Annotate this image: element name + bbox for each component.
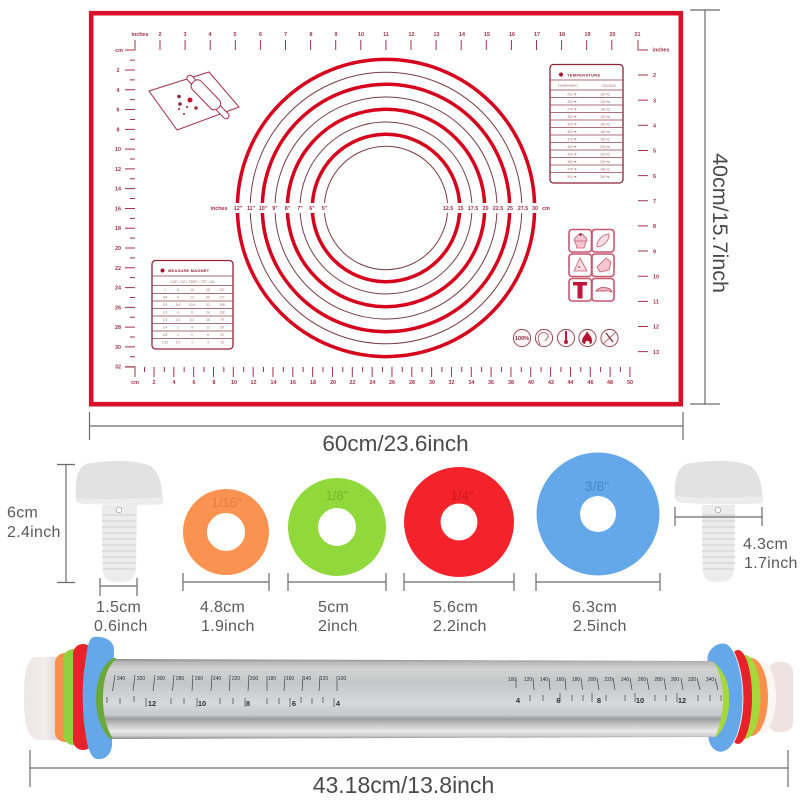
left etched ruler	[107, 675, 346, 708]
circle size labels: inches: 10"	[259, 206, 268, 212]
panel: measure magnet table: 4	[177, 311, 179, 315]
left etched ruler: 320	[137, 676, 145, 682]
panel: measure magnet table: 8	[191, 311, 193, 315]
panel: temperature table: 275 ℉	[567, 108, 577, 112]
top inch ruler	[125, 32, 640, 50]
panel: measure magnet table: 2	[177, 326, 179, 330]
circle size labels: cm: 27.5	[518, 206, 528, 212]
circle size labels: cm: 17.5	[468, 206, 478, 212]
left etched ruler: 4	[336, 699, 341, 708]
circle size labels: inches: inches	[210, 206, 228, 212]
bottom cm ruler: 40	[528, 380, 534, 386]
right etched ruler: 300	[671, 677, 679, 683]
right etched ruler: 200	[588, 677, 596, 683]
left cm ruler: 4	[116, 88, 120, 94]
right etched ruler: 260	[638, 677, 646, 683]
top inch ruler: 9	[334, 32, 338, 38]
right etched ruler: 280	[654, 677, 663, 683]
right etched ruler: 220	[604, 677, 613, 683]
right etched ruler: 180	[572, 677, 580, 683]
right etched ruler	[508, 677, 721, 705]
left etched ruler: 160	[286, 676, 294, 682]
right inch ruler	[638, 40, 670, 356]
panel: measure magnet table: 2	[191, 333, 193, 337]
left cm ruler: 18	[115, 226, 121, 232]
panel: measure magnet table: 1	[164, 288, 166, 292]
panel: temperature table: 100 ℃	[600, 92, 610, 96]
left cm ruler: 8	[116, 127, 120, 133]
left end cap	[24, 657, 60, 740]
panel: temperature table: 250 ℉	[567, 100, 577, 104]
left cm ruler: 12	[115, 167, 121, 173]
left cm ruler: 10	[115, 147, 121, 153]
left etched ruler: 6	[292, 699, 296, 708]
bottom cm ruler: 12	[250, 380, 256, 386]
left cm ruler: 6	[116, 108, 120, 114]
panel: temperature table: TEMPERATURE	[567, 72, 600, 78]
panel: temperature table: 190 ℃	[600, 138, 610, 142]
bottom cm ruler	[125, 367, 633, 386]
panel: temperature table: 500 ℉	[567, 175, 577, 179]
panel: measure magnet table: 24	[206, 311, 210, 315]
circle size labels: inches: 9"	[272, 206, 278, 212]
left etched ruler: 120	[320, 676, 328, 682]
panel: temperature table: 450 ℉	[567, 160, 577, 164]
circle size labels: inches: 5"	[322, 206, 328, 212]
top inch ruler: 12	[408, 32, 414, 38]
right end cap	[768, 662, 793, 732]
bottom cm ruler: 20	[330, 380, 336, 386]
bottom cm ruler: 44	[568, 380, 574, 386]
panel: measure magnet table: 1/2	[176, 341, 180, 345]
circle size labels: cm: 25	[507, 206, 513, 212]
disc: red 1/4: 5.6cm	[433, 599, 478, 616]
right inch ruler: 13	[653, 350, 659, 356]
bottom cm ruler: 18	[310, 380, 316, 386]
left tall knob with dimensions	[7, 461, 163, 635]
panel: temperature table: 140 ℃	[600, 108, 610, 112]
circle size labels: inches: 8"	[285, 206, 291, 212]
bottom cm ruler: 6	[192, 380, 196, 386]
dimension: mat width	[90, 412, 683, 456]
left cm ruler: 28	[115, 325, 121, 331]
disc: orange 1/16: 4.8cm	[200, 599, 245, 616]
panel: measure magnet table: 79	[220, 318, 224, 322]
bottom cm ruler: 48	[607, 380, 613, 386]
right inch ruler: 11	[653, 300, 659, 306]
left cm ruler: 30	[115, 345, 121, 351]
panel: measure magnet table: 6	[177, 296, 179, 300]
circle size labels: inches	[210, 206, 328, 212]
panel: temperature table: 475 ℉	[567, 168, 577, 172]
panel: temperature table: 425 ℉	[567, 152, 577, 156]
bottom cm ruler: 4	[172, 380, 176, 386]
disc: blue 3/8: 2.5inch	[573, 618, 627, 635]
panel: measure magnet table: 177	[219, 296, 225, 300]
dimension: rolling pin length: 43.18cm/13.8inch	[313, 772, 494, 798]
panel: measure magnet table: 2/3	[163, 303, 167, 307]
panel: temperature table: 160 ℃	[600, 122, 610, 126]
bottom cm ruler: 24	[370, 380, 376, 386]
panel: measure magnet table: 118	[219, 311, 225, 315]
icon: knob	[76, 461, 163, 582]
top inch ruler: 3	[184, 32, 186, 38]
disc: blue 3/8	[536, 474, 660, 635]
panel: temperature table: 260 ℃	[600, 175, 610, 179]
circle size labels: cm: 22.5	[493, 206, 503, 212]
panel: measure magnet table: 15	[220, 341, 224, 345]
circle size labels: cm	[443, 206, 550, 212]
circle size labels: cm: 20	[482, 206, 488, 212]
right etched ruler: 100	[508, 677, 516, 683]
bottom cm ruler: 46	[588, 380, 594, 386]
right spacer rings	[707, 643, 776, 752]
right inch ruler: 8	[653, 224, 656, 230]
top inch ruler: 16	[509, 32, 515, 38]
bottom cm ruler: 26	[389, 380, 395, 386]
left cm ruler: 2	[116, 68, 120, 74]
panel: measure magnet table: 1/3	[163, 318, 167, 322]
left cm ruler: 20	[115, 246, 121, 252]
dimension: mat height	[690, 10, 732, 404]
disc: orange 1/16	[183, 495, 269, 635]
right inch ruler: 5	[653, 148, 656, 154]
right etched ruler: 4	[516, 696, 521, 705]
left tall knob with dimensions: 2.4inch	[7, 524, 61, 541]
disc: red 1/4: 2.2inch	[433, 618, 487, 635]
panel: temperature table: 400 ℉	[567, 145, 577, 149]
panel: measure magnet table: 1	[191, 341, 193, 345]
top inch ruler: inches	[131, 32, 149, 38]
circle size labels: inches: 7"	[297, 206, 303, 212]
panel: measure magnet table: 12	[206, 326, 210, 330]
left etched ruler: 300	[157, 676, 165, 682]
top inch ruler: 20	[610, 32, 616, 38]
panel: temperature table: 120 ℃	[600, 100, 610, 104]
bottom cm ruler: 14	[270, 380, 276, 386]
panel: temperature table	[550, 64, 623, 183]
bottom cm ruler: 36	[488, 380, 494, 386]
panel: temperature table: 240 ℃	[600, 168, 610, 172]
panel: temperature table: 300 ℉	[567, 115, 577, 119]
left etched ruler: 240	[213, 676, 221, 682]
bottom cm ruler: cm	[131, 380, 139, 386]
panel: pastry mat	[91, 13, 681, 404]
bottom cm ruler: 28	[409, 380, 415, 386]
top inch ruler: 8	[310, 32, 312, 38]
dimension: mat width: 60cm/23.6inch	[322, 431, 469, 456]
panel: temperature table: 230 ℃	[600, 160, 610, 164]
panel: measure magnet table: 59	[220, 326, 224, 330]
panel: temperature table: 180 ℃	[600, 130, 610, 134]
top inch ruler: 5	[234, 32, 236, 38]
left etched ruler: 180	[268, 676, 276, 682]
panel: measure magnet table	[152, 260, 233, 349]
right etched ruler: 120	[524, 677, 532, 683]
rolling pin	[24, 637, 793, 759]
panel: temperature table: CELSIUS	[602, 84, 616, 88]
panel: measure magnet table: 4	[191, 326, 193, 330]
circle size labels: inches: 11"	[247, 206, 256, 212]
steel rod	[103, 659, 723, 739]
left spacer rings	[55, 637, 116, 759]
disc: green 1/8: 2inch	[318, 618, 358, 635]
disc: green 1/8: 1/8"	[326, 488, 349, 503]
panel: temperature table: 325 ℉	[567, 122, 577, 126]
bottom cm ruler: 2	[152, 380, 156, 386]
panel: measure magnet table: 1/16	[162, 341, 168, 345]
mat border	[91, 13, 681, 404]
bottom cm ruler: 8	[212, 380, 216, 386]
panel: measure magnet table: 16	[206, 318, 210, 322]
left cm ruler: 16	[115, 206, 121, 212]
top inch ruler: 6	[259, 32, 262, 38]
width label: 4.3cm	[743, 536, 788, 553]
left etched ruler: 10	[198, 699, 206, 708]
left etched ruler: 100	[338, 676, 346, 682]
top inch ruler: 7	[284, 32, 287, 38]
bottom cm ruler: 38	[508, 380, 514, 386]
left etched ruler: 340	[117, 676, 125, 682]
panel: measure magnet table: 1/4	[163, 326, 167, 330]
right short knob with dimensions: 1.7inch	[744, 555, 798, 572]
panel: measure magnet table: 8	[177, 288, 179, 292]
top inch ruler: 4	[208, 32, 212, 38]
circle size labels: cm: 30	[532, 206, 538, 212]
disc: red 1/4	[404, 485, 514, 635]
panel: measure magnet table: 6	[207, 333, 209, 337]
disc: orange 1/16: 1.9inch	[201, 618, 255, 635]
circle size labels: inches: 12"	[234, 206, 243, 212]
left etched ruler: 220	[232, 676, 240, 682]
panel: measure magnet table: 3	[207, 341, 209, 345]
disc: green 1/8: 5cm	[318, 599, 349, 616]
concentric measuring circles	[232, 59, 540, 357]
panel: temperature table: 200 ℃	[600, 145, 610, 149]
top inch ruler: 13	[434, 32, 440, 38]
disc: green 1/8	[288, 488, 386, 635]
disc: blue 3/8: 3/8"	[585, 478, 609, 494]
panel: measure magnet table: 48	[206, 288, 210, 292]
panel: measure magnet table: 5.4	[176, 303, 180, 307]
right etched ruler: 140	[540, 677, 548, 683]
bottom cm ruler: 34	[468, 380, 474, 386]
icon: knob	[675, 461, 763, 582]
right short knob with dimensions	[675, 461, 798, 582]
bottom cm ruler: 32	[448, 380, 454, 386]
right inch ruler: 12	[653, 324, 659, 330]
top inch ruler: 19	[584, 32, 590, 38]
circle size labels: cm: 15	[458, 206, 464, 212]
top inch ruler: 2	[158, 32, 162, 38]
right etched ruler: 12	[678, 696, 686, 705]
right etched ruler: 6	[556, 696, 561, 705]
right etched ruler: 320	[688, 677, 696, 683]
panel: measure magnet table: 2.6	[176, 318, 180, 322]
bottom cm ruler: 16	[290, 380, 296, 386]
icon grid: baking foods	[569, 230, 614, 301]
circle size labels: cm: cm	[542, 206, 550, 212]
left etched ruler: 200	[250, 676, 258, 682]
icon row: material properties	[513, 329, 618, 347]
panel: measure magnet table: 12	[190, 296, 194, 300]
top inch ruler: 14	[459, 32, 465, 38]
right inch ruler: 4	[653, 124, 656, 130]
right inch ruler: 10	[653, 274, 659, 280]
shaft width label: 1.5cm	[96, 599, 141, 616]
right etched ruler: 8	[597, 696, 601, 705]
icon: rolling pin on dough	[149, 72, 239, 130]
left etched ruler: 12	[148, 699, 156, 708]
right etched ruler: 340	[706, 677, 714, 683]
panel: measure magnet table: 32	[206, 303, 210, 307]
bottom cm ruler: 22	[350, 380, 356, 386]
top inch ruler: 21	[634, 32, 640, 38]
left etched ruler: 140	[303, 676, 311, 682]
icon row: material properties: 100%	[515, 336, 529, 342]
right inch ruler: 7	[653, 199, 656, 205]
panel: measure magnet table: 36	[206, 296, 210, 300]
top inch ruler: 10	[358, 32, 364, 38]
left tall knob with dimensions: 0.6inch	[94, 618, 148, 635]
left etched ruler: 260	[195, 676, 203, 682]
right inch ruler: 9	[653, 250, 656, 256]
disc: blue 3/8: 6.3cm	[572, 599, 617, 616]
left cm ruler: 26	[115, 305, 121, 311]
left etched ruler: 280	[176, 676, 184, 682]
left etched ruler: 8	[246, 699, 250, 708]
dimension: mat height: 40cm/15.7inch	[708, 153, 732, 293]
right inch ruler: 6	[653, 174, 656, 180]
panel: temperature table: 375 ℉	[567, 138, 577, 142]
disc: orange 1/16: 1/16"	[212, 495, 242, 510]
left cm ruler: 24	[115, 286, 121, 292]
panel: measure magnet table: 1/2	[163, 311, 167, 315]
bottom cm ruler: 30	[429, 380, 435, 386]
panel: temperature table: FAHRENHEIT	[558, 84, 578, 88]
panel: measure magnet table: 10.6	[189, 303, 195, 307]
top inch ruler: 18	[559, 32, 565, 38]
panel: temperature table: 212 ℉	[567, 92, 577, 96]
panel: measure magnet table: 3/4	[163, 296, 167, 300]
right inch ruler: 3	[653, 98, 656, 104]
top inch ruler: 15	[484, 32, 490, 38]
circle size labels: inches: 6"	[309, 206, 315, 212]
panel: measure magnet table: 158	[219, 303, 225, 307]
circle size labels: cm: 12.5	[443, 206, 453, 212]
left cm ruler: 14	[115, 187, 121, 193]
left cm ruler: cm	[115, 48, 123, 54]
panel: measure magnet table: 16	[190, 288, 194, 292]
top inch ruler: 11	[383, 32, 389, 38]
right inch ruler: inches	[652, 48, 670, 54]
panel: measure magnet table: 1	[177, 333, 179, 337]
right etched ruler: 240	[621, 677, 629, 683]
left cm ruler	[115, 48, 132, 371]
dimension: rolling pin length	[30, 750, 788, 798]
bottom cm ruler: 10	[231, 380, 237, 386]
height label: 6cm	[7, 504, 38, 522]
panel: measure magnet table: 5.3	[190, 318, 194, 322]
disc: red 1/4: 1/4"	[451, 488, 474, 503]
panel: measure magnet table: 30	[220, 333, 224, 337]
bottom cm ruler: 42	[548, 380, 554, 386]
left cm ruler: 32	[115, 365, 121, 371]
panel: temperature table: 150 ℃	[600, 115, 610, 119]
right inch ruler: 2	[653, 73, 656, 79]
panel: temperature table: 220 ℃	[600, 152, 610, 156]
panel: measure magnet table: CUP = OZ = TBSP = TSP = ML	[170, 280, 215, 284]
bottom cm ruler: 50	[627, 380, 633, 386]
panel: measure magnet table: MEASURE MAGNET	[168, 268, 210, 273]
panel: measure magnet table: 237	[219, 288, 225, 292]
right etched ruler: 160	[556, 677, 564, 683]
right etched ruler: 10	[636, 696, 644, 705]
top inch ruler: 17	[534, 32, 540, 38]
left cm ruler: 22	[115, 266, 121, 272]
panel: measure magnet table: 1/8	[163, 333, 167, 337]
panel: temperature table: 350 ℉	[567, 130, 577, 134]
